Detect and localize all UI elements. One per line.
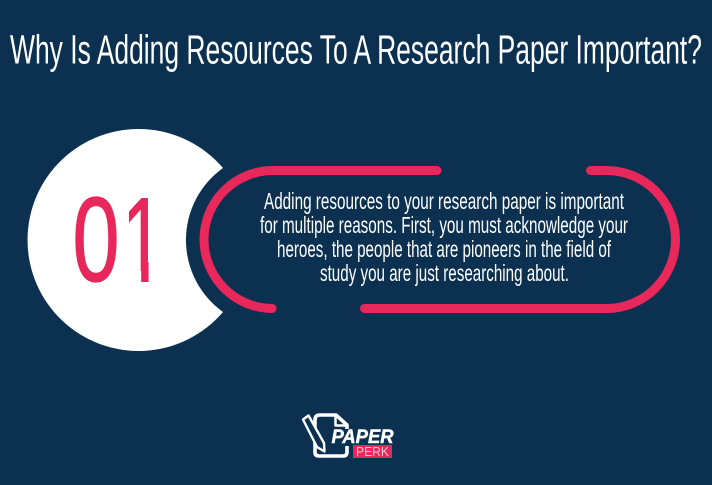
number 01: 0 [72, 173, 120, 307]
logo tag: PERK [356, 445, 390, 459]
logo wordmark: PAPER [332, 426, 394, 448]
number 01: 1 [122, 173, 164, 307]
icon: document [315, 415, 347, 456]
number 01 [75, 196, 149, 283]
icon: pencil [303, 416, 324, 452]
panel: reason text outline [204, 170, 676, 308]
text block: reason: study you are just researching about. [320, 260, 569, 286]
logo: Paper Perk [303, 415, 394, 459]
text block: reason [260, 188, 628, 286]
number circle badge [28, 129, 223, 351]
circle with notch [28, 129, 223, 351]
